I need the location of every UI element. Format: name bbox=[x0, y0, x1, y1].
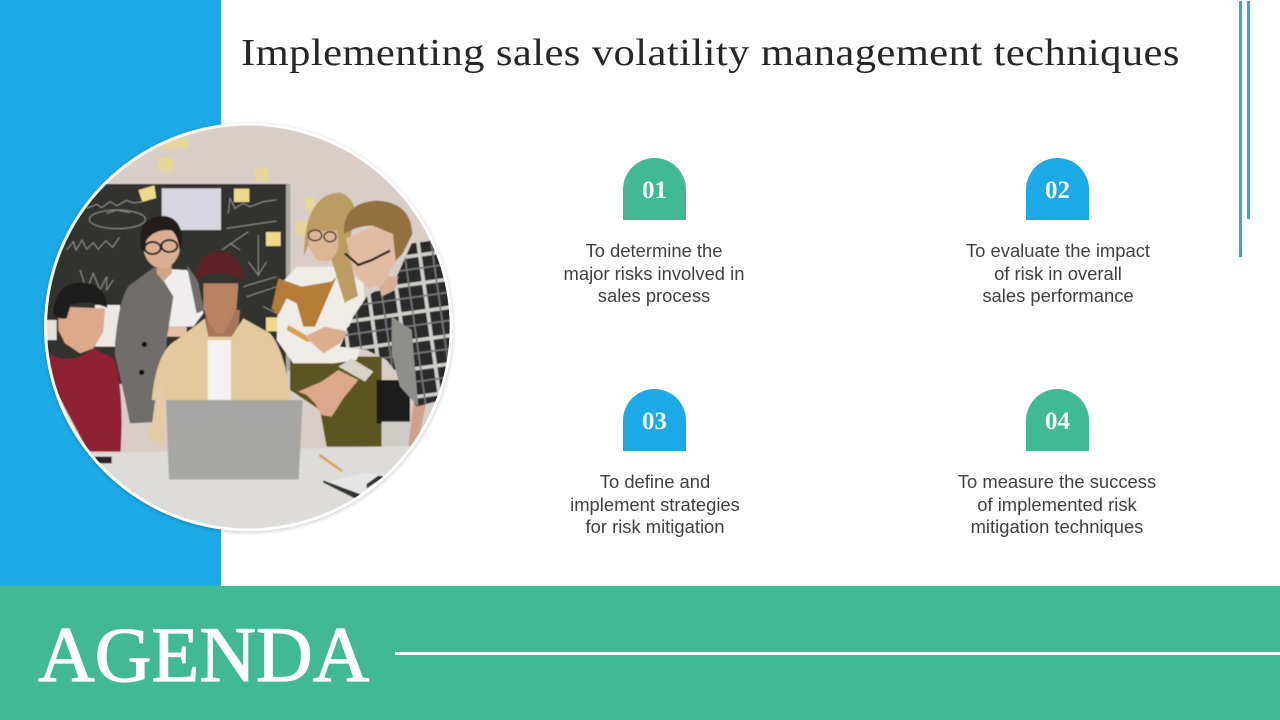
item 04 number tag: 04 bbox=[1045, 408, 1070, 435]
person: man in beanie and tan shirt bbox=[147, 251, 291, 445]
item 03 number tag: 03 bbox=[642, 408, 667, 435]
item 04 text: To measure the success bbox=[958, 471, 1156, 492]
decorative blue vertical lines bbox=[1239, 1, 1250, 257]
item 04 text: of implemented risk bbox=[977, 494, 1137, 514]
table bbox=[92, 446, 410, 528]
blackboard bbox=[43, 138, 315, 384]
item 02 text bbox=[966, 240, 1150, 306]
item 01 number tag: 01 bbox=[642, 177, 667, 204]
notebook bbox=[328, 473, 384, 494]
agenda heading: AGENDA bbox=[38, 611, 369, 698]
item 03 text: To define and bbox=[600, 471, 710, 492]
laptop bbox=[166, 400, 303, 479]
item 04 text bbox=[958, 471, 1156, 537]
item 02 number tag: 02 bbox=[1045, 177, 1070, 204]
person: woman in grey blazer bbox=[115, 216, 204, 423]
item 03 text: for risk mitigation bbox=[586, 516, 724, 537]
item 01 text bbox=[564, 240, 744, 306]
person: man in plaid shirt bbox=[298, 201, 453, 447]
item 02 text: sales performance bbox=[982, 285, 1134, 306]
item 04 text: mitigation techniques bbox=[971, 516, 1143, 537]
item 04 number tag bbox=[1026, 389, 1089, 451]
item 03 text bbox=[570, 471, 740, 537]
circular team photo illustration bbox=[42, 122, 455, 534]
item 03 number tag bbox=[623, 389, 686, 451]
item 01 number tag bbox=[623, 158, 686, 220]
item 02 number tag bbox=[1026, 158, 1089, 220]
item 01 text: major risks involved in bbox=[564, 262, 744, 284]
item 03 text: implement strategies bbox=[570, 494, 740, 514]
banner rule line bbox=[395, 652, 1280, 655]
item 02 text: To evaluate the impact bbox=[966, 240, 1150, 261]
pencil bbox=[319, 455, 342, 471]
item 01 text: sales process bbox=[598, 285, 710, 306]
person: man in red sweater bbox=[48, 283, 122, 452]
item 01 text: To determine the bbox=[586, 240, 722, 261]
green agenda banner bbox=[0, 586, 1280, 720]
person: woman with blonde hair bbox=[272, 193, 382, 447]
title: Implementing sales volatility management techniques bbox=[241, 32, 1180, 74]
blue side panel bbox=[0, 0, 221, 586]
item 02 text: of risk in overall bbox=[994, 262, 1122, 284]
